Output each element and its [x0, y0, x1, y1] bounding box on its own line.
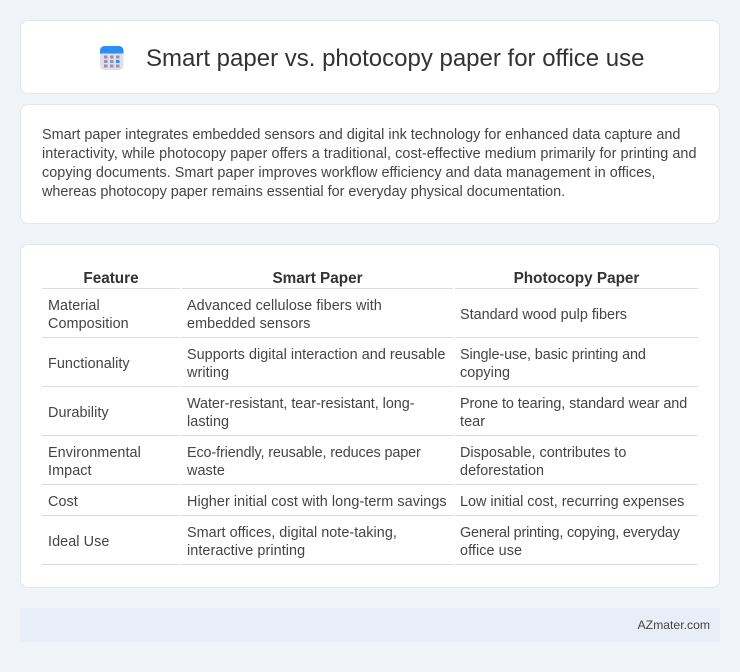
row: Environmental Impact: Impact: [48, 463, 92, 479]
row: Cost: Cost: [48, 494, 78, 510]
text: interactive printing: [187, 543, 305, 559]
row: Ideal Use: Ideal Use: [48, 534, 109, 550]
intro text: copying documents. Smart paper improves workflow efficiency and data management in offices,: [42, 165, 655, 181]
text: writing: [187, 365, 229, 381]
title: Smart paper vs. photocopy paper for office use: [146, 45, 645, 72]
intro text: interactivity, while photocopy paper offers a traditional, cost-effective medium primarily for printing and: [42, 146, 697, 162]
table header: Smart Paper: Smart Paper: [272, 270, 363, 286]
text: office use: [460, 543, 522, 559]
row: Functionality: Functionality: [48, 356, 130, 372]
text: Low initial cost, recurring expenses: [460, 494, 684, 510]
row: Material Composition: Composition: [48, 316, 129, 332]
panel: intro: [20, 104, 720, 224]
intro text: whereas photocopy paper remains essential for everyday physical documentation.: [42, 184, 565, 200]
row: Environmental Impact: Environmental: [48, 445, 141, 461]
text: copying: [460, 365, 510, 381]
row: Material Composition: [48, 298, 129, 332]
text: Disposable, contributes to: [460, 445, 626, 461]
text: deforestation: [460, 463, 544, 479]
row: Environmental Impact: [48, 445, 141, 479]
intro text: Smart paper integrates embedded sensors and digital ink technology for enhanced data capture and: [42, 126, 680, 142]
text: Standard wood pulp fibers: [460, 307, 627, 323]
icon: calendar: [100, 46, 124, 70]
text: lasting: [187, 414, 229, 430]
text: Single-use, basic printing and: [460, 347, 646, 363]
footer bar: [20, 608, 720, 642]
text: embedded sensors: [187, 316, 311, 332]
panel: comparison table: [20, 244, 720, 588]
footer credit: AZmater.com: [638, 618, 710, 632]
table header: Feature: Feature: [83, 270, 139, 286]
text: Eco-friendly, reusable, reduces paper: [187, 445, 421, 461]
text: waste: [187, 463, 225, 479]
panel: title card: [20, 20, 720, 94]
intro text: [42, 126, 697, 200]
row: Durability: Durability: [48, 405, 109, 421]
table header: Photocopy Paper: Photocopy Paper: [514, 270, 639, 286]
text: Advanced cellulose fibers with: [187, 298, 382, 314]
text: Water-resistant, tear-resistant, long-: [187, 396, 414, 412]
text: tear: [460, 414, 485, 430]
row: Material Composition: Material: [48, 298, 100, 314]
text: Smart offices, digital note-taking,: [187, 525, 397, 541]
text: Higher initial cost with long-term savings: [187, 494, 447, 510]
text: Supports digital interaction and reusable: [187, 347, 445, 363]
text: Prone to tearing, standard wear and: [460, 396, 687, 412]
text: General printing, copying, everyday: [460, 525, 680, 541]
